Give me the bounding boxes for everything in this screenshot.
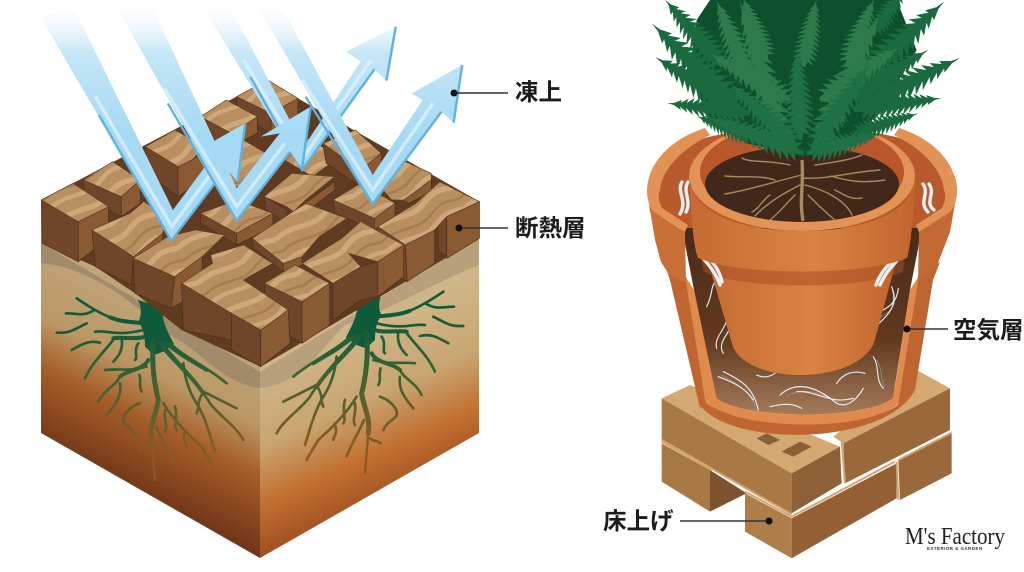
soil with roots — [705, 146, 899, 222]
label: air layer: 空気層 — [953, 317, 1024, 343]
ice arrows — [40, 0, 462, 241]
inner pot body — [700, 254, 905, 375]
logo: M's Factory — [905, 524, 1005, 550]
outer wall right — [898, 262, 940, 405]
arrow 1 — [40, 10, 245, 241]
roots: right tree — [277, 292, 463, 473]
label: raised floor — [603, 508, 772, 534]
outer pot bottom — [700, 390, 915, 435]
insulation wood blocks — [41, 80, 479, 367]
label: insulation layer — [456, 215, 586, 241]
logo: EXTERIOR & GARDEN — [927, 546, 982, 551]
arrow 4 — [254, 0, 462, 204]
bricks — [662, 370, 952, 558]
air wisps — [707, 280, 898, 410]
inner pot rim — [689, 121, 915, 272]
arrow 3 — [199, 0, 396, 170]
label: raised floor: 床上げ — [603, 508, 674, 534]
tree foliage — [639, 0, 967, 166]
outer wall left — [664, 262, 706, 408]
arrow 2 — [113, 0, 311, 221]
outer pot cutaway shell — [647, 128, 957, 435]
rim faces — [648, 198, 686, 282]
label: air layer — [904, 317, 1024, 343]
panel: soil insulation cube — [40, 0, 479, 558]
soil block right face — [260, 200, 479, 558]
panel: double pot — [639, 0, 967, 558]
soil block left face — [41, 200, 260, 558]
label: frost heave — [450, 79, 562, 105]
upper air wisps — [680, 182, 934, 285]
air cavity — [682, 228, 922, 414]
roots: left tree — [57, 298, 243, 480]
label: insulation layer: 断熱層 — [515, 215, 586, 241]
label: frost heave: 凍上 — [515, 79, 562, 105]
